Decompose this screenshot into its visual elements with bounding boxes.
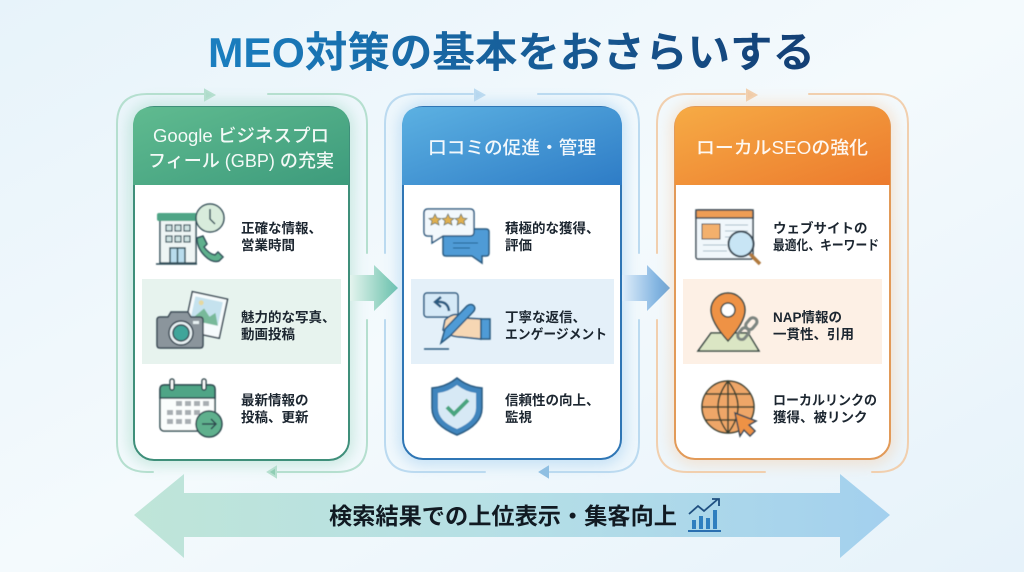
item text: 丁寧な返信、: [505, 309, 586, 325]
arrow: panel 2 to panel 3: [622, 265, 670, 311]
panel glow: [670, 102, 896, 466]
icon: building, clock and phone: [156, 204, 224, 264]
card: [134, 107, 349, 460]
arrow: panel 1 to panel 2: [350, 265, 398, 311]
icon: browser with magnifier: [696, 210, 760, 264]
item text: 営業時間: [241, 237, 295, 253]
item text: ウェブサイトの: [773, 220, 868, 236]
icon: calendar: [160, 379, 222, 437]
panel glow: [128, 102, 354, 466]
icon: shield with check: [432, 378, 482, 435]
item text: 一貫性、引用: [773, 326, 854, 342]
icon: speech bubbles with stars: [424, 209, 489, 263]
item text: 積極的な獲得、: [505, 220, 600, 236]
item text: 動画投稿: [241, 326, 295, 342]
item text: ローカルリンクの: [773, 393, 877, 408]
icon: camera and photo: [157, 292, 228, 348]
panel glow: [398, 102, 626, 466]
item text: 最新情報の: [241, 392, 308, 408]
title: MEO対策の基本をおさらいする: [208, 29, 815, 76]
cycle ring with arrows: [385, 90, 639, 477]
card header: [675, 107, 890, 185]
highlighted row: [411, 279, 614, 364]
cycle ring with arrows: [657, 90, 908, 472]
item text: 最適化、キーワード: [773, 237, 879, 253]
panel: Google Business Profile: [117, 90, 367, 477]
card header: [133, 107, 349, 185]
highlighted row: [683, 279, 882, 364]
panel: reviews: [385, 90, 639, 477]
header text: 口コミの促進・管理: [428, 138, 596, 158]
icon: replying by hand with pen: [424, 293, 490, 349]
icon: globe with cursor: [702, 381, 756, 436]
panel: local SEO: [657, 90, 908, 472]
header text: Google ビジネスプロ: [153, 126, 329, 146]
item text: NAP情報の: [773, 309, 842, 325]
card: [675, 107, 890, 459]
card header: [402, 107, 622, 185]
item text: 獲得、被リンク: [773, 409, 868, 425]
item text: 評価: [505, 238, 532, 253]
highlighted row: [142, 279, 341, 364]
item text: 監視: [505, 409, 532, 425]
item text: 正確な情報、: [241, 220, 322, 236]
item text: 信頼性の向上、: [505, 392, 600, 408]
banner text: 検索結果での上位表示・集客向上: [329, 503, 677, 529]
bottom result banner: [134, 474, 890, 558]
cycle ring with arrows: [117, 90, 367, 477]
icon: rising bar chart: [688, 499, 721, 531]
double-headed arrow: [134, 474, 890, 558]
header text: ローカルSEOの強化: [696, 138, 868, 158]
item text: エンゲージメント: [505, 326, 607, 342]
item text: 魅力的な写真、: [241, 309, 336, 325]
icon: map pin and chain: [698, 293, 759, 351]
header text: フィール (GBP) の充実: [148, 151, 334, 171]
card: [403, 107, 621, 459]
item text: 投稿、更新: [241, 409, 309, 425]
header text: [148, 126, 334, 171]
